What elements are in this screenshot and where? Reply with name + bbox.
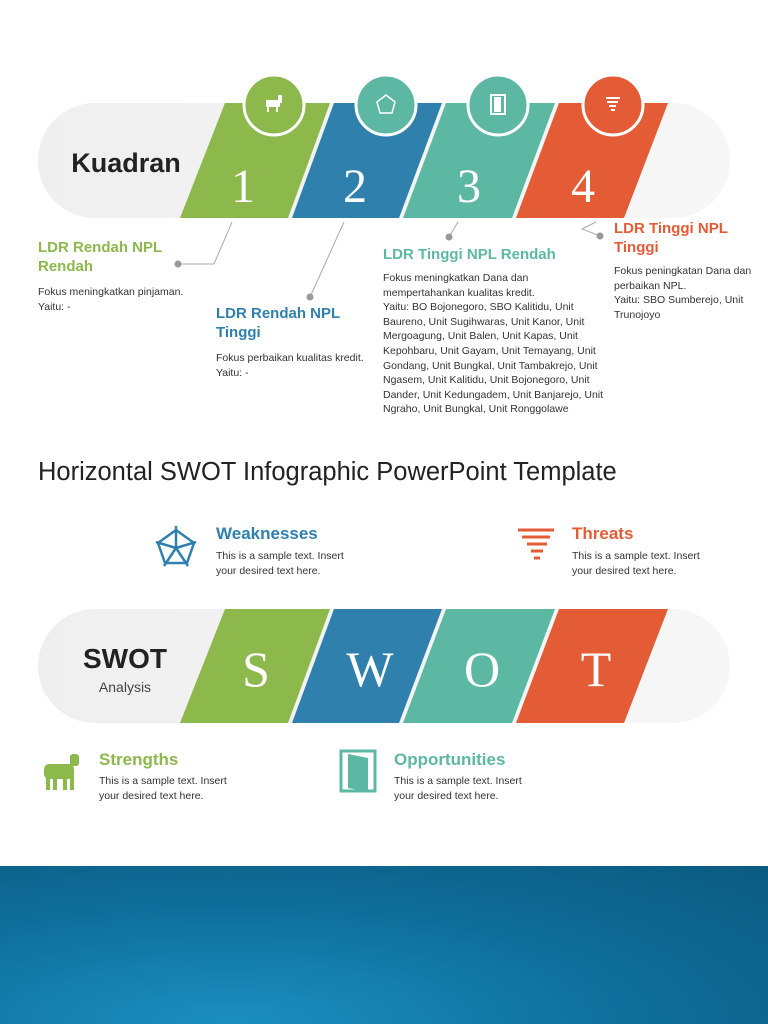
icon circle 1 <box>244 75 304 135</box>
pill: swot <box>38 609 730 723</box>
opportunities text <box>394 750 522 802</box>
parallelogram 1 <box>180 103 330 218</box>
callout 2: LDR Rendah NPL Tinggi <box>216 305 340 341</box>
threats text: Threats <box>572 524 633 543</box>
parallelogram 3: 3 <box>457 160 481 213</box>
top band graphic: W <box>346 641 394 697</box>
callout 2 <box>216 305 364 379</box>
icon: weakness web <box>156 526 196 566</box>
opportunities text: Opportunities <box>394 750 505 769</box>
callout 4: Yaitu: SBO Sumberejo, Unit Trunojoyo <box>614 294 743 321</box>
opportunities text: your desired text here. <box>394 790 498 802</box>
callout 4: LDR Tinggi NPL Tinggi <box>614 220 728 256</box>
swot label <box>83 643 167 695</box>
callout 1: Yaitu: - <box>38 301 70 313</box>
parallelogram 3 <box>403 103 555 218</box>
title: Kuadran: Kuadran <box>71 148 181 178</box>
icon circle 4 <box>583 75 643 135</box>
weaknesses text: Weaknesses <box>216 524 318 543</box>
icon circle 2 <box>356 75 416 135</box>
parallelogram 2 <box>292 103 442 218</box>
callout 4: perbaikan NPL. <box>614 280 686 292</box>
weaknesses text <box>216 524 344 577</box>
callout 4: Fokus peningkatan Dana dan <box>614 265 751 277</box>
icon: door <box>341 751 375 792</box>
parallelogram 4: 4 <box>571 160 595 213</box>
top band graphic: S <box>242 641 270 697</box>
strengths text <box>99 750 227 802</box>
callout 1 <box>38 239 183 313</box>
heading: SWOT title: Horizontal SWOT Infographic PowerPoint Template <box>38 458 617 486</box>
icon: sheep <box>44 754 79 790</box>
top band graphic: T <box>581 641 611 697</box>
threats text: This is a sample text. Insert <box>572 550 700 562</box>
callout 3: Yaitu: BO Bojonegoro, SBO Kalitidu, Unit Baureno, Unit Sugihwaras, Unit Kanor, Unit Mergoagung, Unit Balen, Unit Kapas, Unit Kepohbaru, Unit Gayam, Unit Temayang, Unit Gondang, Unit Bungkal, Unit Tambakrejo, Unit Ngasem, Unit Kalitidu, Unit Bojonegoro, Unit Dander, Unit Kedungadem, Unit Banjarejo, Unit Ngraho, Unit Bungkal, Unit Ronggolawe <box>383 301 603 415</box>
top band graphic: O <box>464 641 500 697</box>
pill: kuadran <box>38 103 730 218</box>
swot label: Analysis <box>99 679 151 695</box>
weaknesses text: This is a sample text. Insert <box>216 550 344 562</box>
connectors <box>178 222 600 297</box>
opportunities text: This is a sample text. Insert <box>394 775 522 787</box>
callout 3: Fokus meningkatkan Dana dan <box>383 272 528 284</box>
swot label: SWOT <box>83 643 167 674</box>
bottom blue background <box>0 866 768 1024</box>
icon circle 3 <box>468 75 528 135</box>
parallelogram 4 <box>516 103 668 218</box>
threats text <box>572 524 700 577</box>
callout 3: LDR Tinggi NPL Rendah <box>383 246 556 263</box>
weaknesses text: your desired text here. <box>216 565 320 577</box>
parallelogram 1: 1 <box>231 160 255 213</box>
icon: tornado <box>518 530 554 558</box>
callout 2: Fokus perbaikan kualitas kredit. <box>216 352 364 364</box>
callout 1: LDR Rendah NPL Rendah <box>38 239 162 275</box>
strengths text: your desired text here. <box>99 790 203 802</box>
callout 4 <box>614 220 751 321</box>
callout 1: Fokus meningkatkan pinjaman. <box>38 286 183 298</box>
parallelogram 2: 2 <box>343 160 367 213</box>
threats text: your desired text here. <box>572 565 676 577</box>
callout 2: Yaitu: - <box>216 367 248 379</box>
strengths text: Strengths <box>99 750 178 769</box>
strengths text: This is a sample text. Insert <box>99 775 227 787</box>
callout 3 <box>383 246 603 415</box>
callout 3: mempertahankan kualitas kredit. <box>383 287 535 299</box>
